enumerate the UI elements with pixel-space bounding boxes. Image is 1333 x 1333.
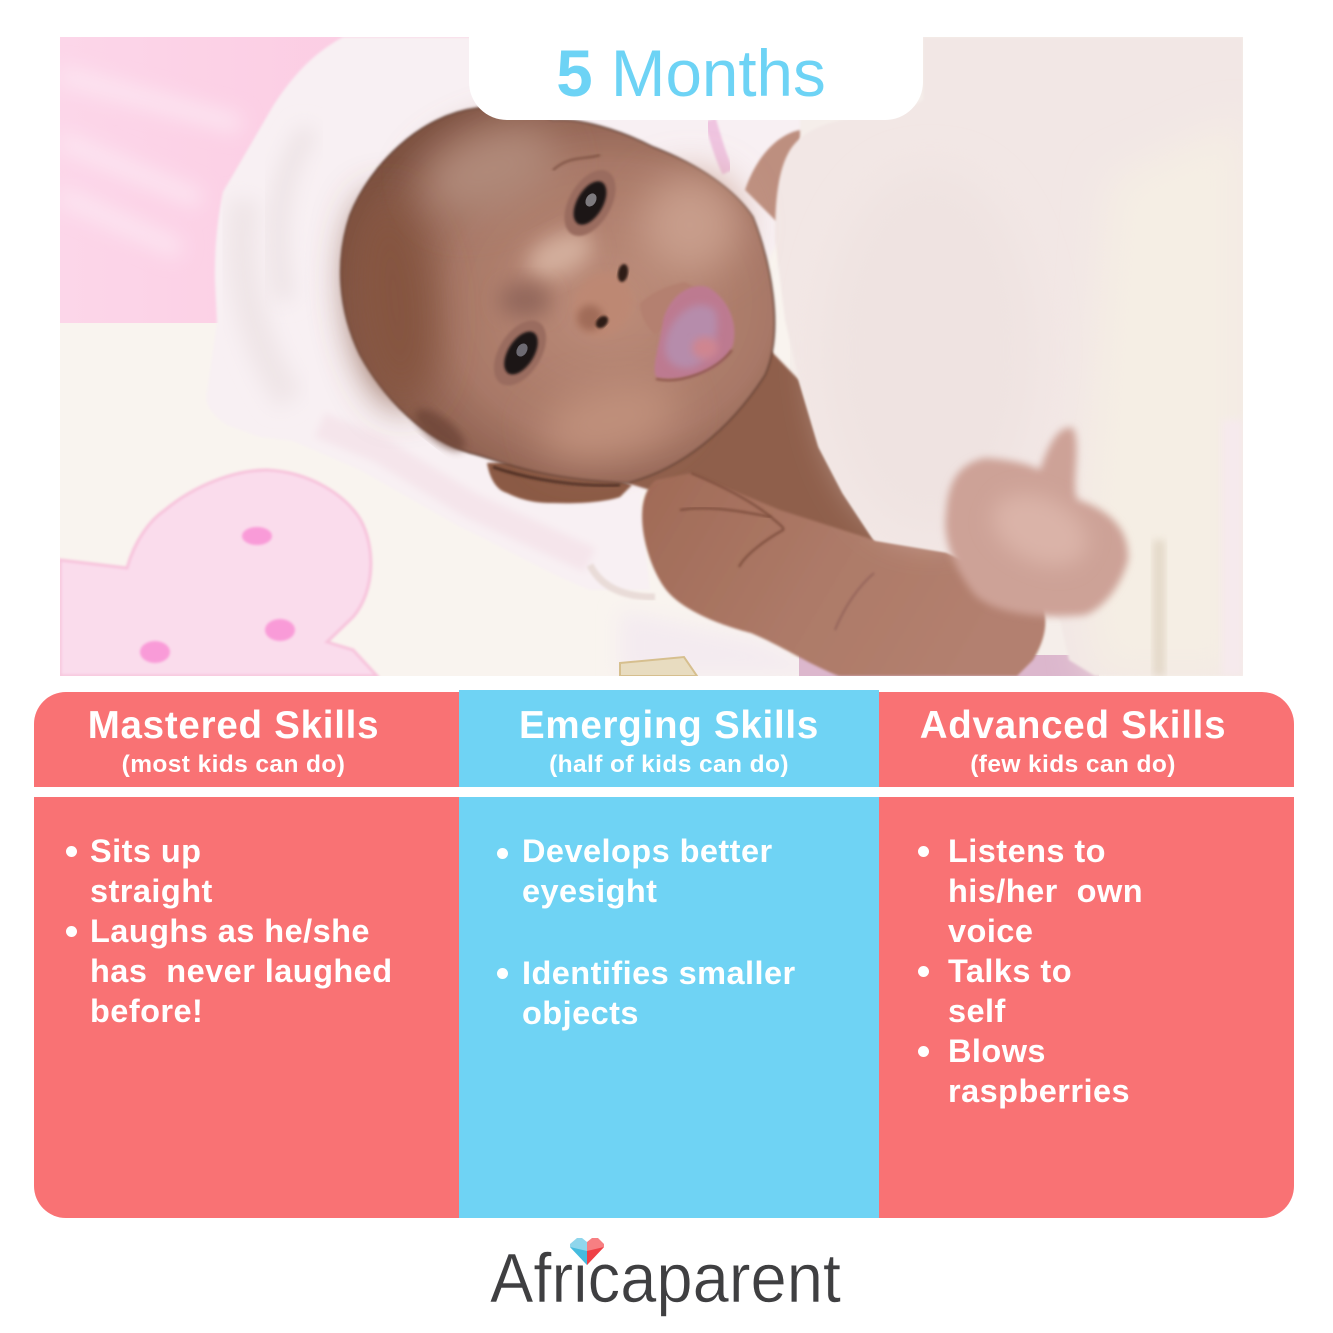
skill: smaller objects: Identifies smaller	[522, 955, 796, 991]
cream mat base	[60, 37, 1243, 676]
hand	[945, 428, 1128, 616]
skill: talks to self: self	[948, 993, 1006, 1029]
panel: mastered skills list	[34, 797, 459, 1218]
skill: listens	[948, 833, 1143, 949]
skill: listens: voice	[948, 913, 1033, 949]
mat lilac area	[620, 610, 840, 676]
skill: sits up straight	[90, 833, 213, 909]
panel: advanced skills header	[879, 692, 1294, 787]
panel: mastered skills header	[34, 692, 459, 787]
far shoulder	[745, 130, 800, 230]
skill: listens: his/her own	[948, 873, 1143, 909]
right side background	[790, 37, 1243, 657]
skill: laughs: before!	[90, 993, 203, 1029]
skill: eyesight: eyesight	[522, 873, 657, 909]
skill: eyesight: Develops better	[522, 833, 773, 869]
skill: eyesight	[522, 833, 773, 909]
heading: mastered skills: Mastered Skills	[88, 704, 379, 747]
skill: sits up straight: straight	[90, 873, 213, 909]
skill: talks to self	[948, 953, 1072, 1029]
icon: heart	[570, 1238, 604, 1265]
skill: raspberries: Blows	[948, 1033, 1046, 1069]
bullet	[497, 848, 508, 859]
chest	[627, 350, 880, 570]
bullet	[66, 926, 77, 937]
skill: laughs	[90, 913, 393, 1029]
logo: Africaparent	[490, 1238, 841, 1317]
baby face	[341, 107, 775, 483]
bullet	[66, 846, 77, 857]
panel: emerging skills header	[459, 690, 879, 787]
panel: emerging skills list	[459, 797, 879, 1218]
ear	[487, 460, 632, 503]
skill: laughs: Laughs as he/she	[90, 913, 370, 949]
skill: smaller objects: objects	[522, 995, 639, 1031]
pink background	[60, 37, 480, 323]
heading: advanced skills: Advanced Skills	[920, 704, 1226, 747]
knit blanket	[775, 37, 1243, 676]
nose	[564, 263, 642, 347]
subheading: most kids: (most kids can do)	[122, 751, 345, 778]
pink bunny appliqué	[60, 470, 377, 676]
bullet	[497, 968, 508, 979]
skill: raspberries: raspberries	[948, 1073, 1130, 1109]
gold label on mat	[620, 657, 697, 676]
title tab	[469, 37, 923, 120]
wordmark: Africaparent	[490, 1239, 841, 1317]
arm	[642, 473, 1045, 676]
eyes	[554, 161, 626, 245]
bullet	[918, 1046, 929, 1057]
subheading: few kids: (few kids can do)	[970, 751, 1176, 778]
bullet	[918, 966, 929, 977]
skill: listens: Listens to	[948, 833, 1106, 869]
skill: talks to self: Talks to	[948, 953, 1072, 989]
heading: emerging skills: Emerging Skills	[519, 704, 819, 747]
skill: raspberries	[948, 1033, 1130, 1109]
pink strip behind arm	[799, 655, 1099, 676]
mouth and tongue	[640, 282, 700, 335]
photo: baby in white knit hat and blanket	[60, 37, 1243, 676]
skill: laughs: has never laughed	[90, 953, 393, 989]
skill: sits up straight: Sits up	[90, 833, 202, 869]
title text: 5 Months	[556, 37, 826, 110]
white knit hat	[206, 37, 800, 597]
subheading: half of kids: (half of kids can do)	[549, 751, 789, 778]
panel: advanced skills list	[879, 797, 1294, 1218]
skill: smaller objects	[522, 955, 796, 1031]
bullet	[918, 846, 929, 857]
